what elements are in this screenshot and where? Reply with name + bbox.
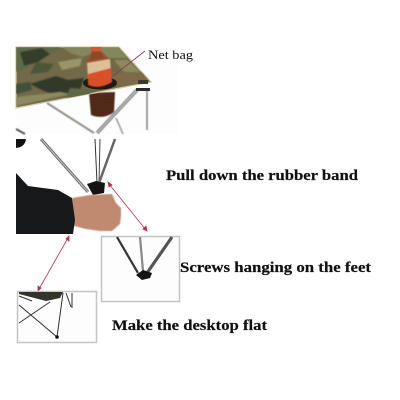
photo: hand pulling rubber band [16,139,121,234]
rubber foot hub [87,181,105,195]
label: screws hanging on the feet: Screws hanging on the feet [180,260,371,276]
label: make the desktop flat: Make the desktop flat [112,318,267,334]
cup holder ring [83,76,117,90]
hand [72,194,121,231]
corner clip [136,88,150,91]
photo: flat desktop [18,292,96,342]
legs [41,139,88,192]
net bag pointer [113,51,145,76]
bottle [87,51,112,87]
net bag [89,92,115,117]
corner slot [138,80,148,84]
photo: folding table with camouflage top and bottle [15,46,152,136]
camouflage table top [16,47,151,108]
infographic canvas [15,46,371,344]
arm sleeve [16,173,75,234]
table legs [16,90,147,134]
photo: screws on the feet [102,236,180,302]
dark corner [16,139,26,148]
arrow: hand to desktop photo [38,236,69,291]
label: net bag: Net bag [148,47,194,62]
bottle cap [91,47,101,51]
arrow: hub to foot photo [108,182,147,231]
label: pull down the rubber band: Pull down the rubber band [166,168,359,184]
